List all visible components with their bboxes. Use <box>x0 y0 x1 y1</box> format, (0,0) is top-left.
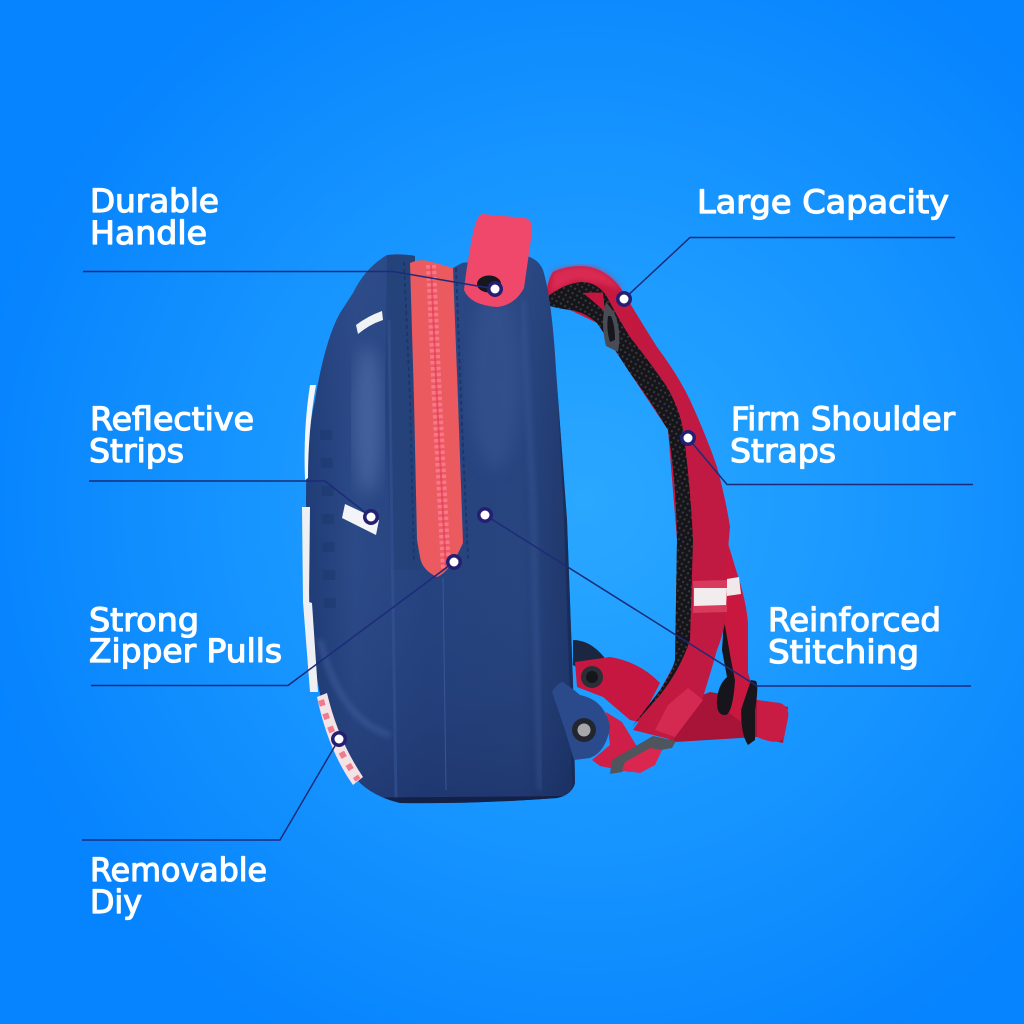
label: strong zipper pulls: Strong <box>89 601 199 639</box>
label: removable diy <box>90 851 267 921</box>
handle <box>464 214 532 307</box>
label: large capacity: Large Capacity <box>697 183 949 221</box>
buckle <box>610 736 676 774</box>
label: durable handle: Durable <box>90 182 219 220</box>
label: reflective strips: Strips <box>89 432 184 470</box>
label: reinforced stitching: Stitching <box>768 633 919 671</box>
zipper <box>404 260 468 577</box>
label: reinforced stitching: Reinforced <box>768 601 941 639</box>
callout dots <box>331 281 696 747</box>
callout lines <box>82 238 973 840</box>
backpack illustration <box>300 214 788 810</box>
velcro tab <box>655 688 703 737</box>
label: reflective strips: Reflective <box>90 400 254 438</box>
label: reflective strips <box>89 400 254 470</box>
label: firm shoulder straps: Firm Shoulder <box>731 400 956 438</box>
reflective band <box>693 580 727 613</box>
hinge tab <box>552 682 610 760</box>
label: removable diy: Removable <box>90 851 267 889</box>
label: durable handle: Handle <box>90 214 207 252</box>
body shell <box>300 250 610 810</box>
shoulder strap main <box>546 266 730 774</box>
label: removable diy: Diy <box>90 883 142 921</box>
label: reinforced stitching <box>768 601 941 671</box>
label: strong zipper pulls <box>89 601 282 670</box>
mesh padding <box>547 282 693 727</box>
label: firm shoulder straps <box>730 400 956 470</box>
label: firm shoulder straps: Straps <box>730 432 836 470</box>
rear straps <box>573 540 788 772</box>
reflective strips <box>302 311 383 785</box>
label: strong zipper pulls: Zipper Pulls <box>89 632 282 670</box>
label: durable handle <box>90 182 219 252</box>
